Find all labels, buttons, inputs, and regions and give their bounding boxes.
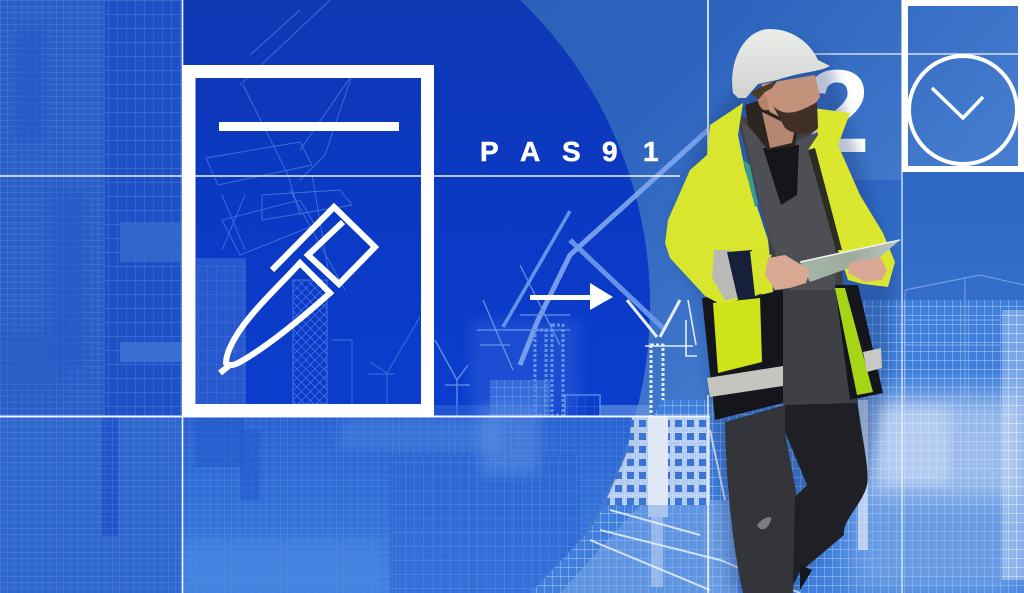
fleece jacket	[737, 117, 857, 405]
illustration: blueprint cranes behind frame	[196, 0, 420, 416]
panel: left building column	[0, 0, 183, 593]
teal lining	[743, 160, 758, 207]
panel: lower blueprint city band	[183, 405, 663, 593]
icon: clock box with chevron	[905, 3, 1021, 169]
shadow halo	[668, 30, 895, 592]
pen icon	[220, 207, 375, 373]
left cuff and reflective band	[712, 250, 772, 300]
jacket lower right panel	[835, 285, 883, 400]
large number 2: 2	[804, 46, 870, 178]
beard	[773, 102, 818, 134]
illustration: white crane outside circle	[627, 300, 697, 417]
trousers	[725, 398, 868, 593]
icon: document frame with pen	[189, 72, 428, 410]
neck and collar shadow	[745, 100, 798, 150]
arrow	[530, 283, 613, 310]
background: large dark blue circle	[0, 0, 650, 593]
illustration: central crane cluster	[380, 130, 708, 417]
label: PAS 91: PAS91	[480, 136, 659, 167]
hands	[765, 255, 887, 290]
tablet	[800, 240, 900, 282]
face	[762, 75, 820, 117]
document frame	[189, 72, 428, 410]
figure: construction worker	[665, 29, 900, 593]
heading line	[219, 122, 399, 131]
hi-vis jacket left	[665, 103, 773, 304]
jacket lower left panel	[702, 290, 783, 420]
hair	[750, 80, 778, 100]
black shirt	[763, 145, 799, 205]
hi-vis jacket right	[808, 108, 895, 287]
helmet	[732, 29, 830, 98]
ear	[758, 94, 768, 110]
panel: white wireframe city on the right	[530, 275, 1024, 593]
